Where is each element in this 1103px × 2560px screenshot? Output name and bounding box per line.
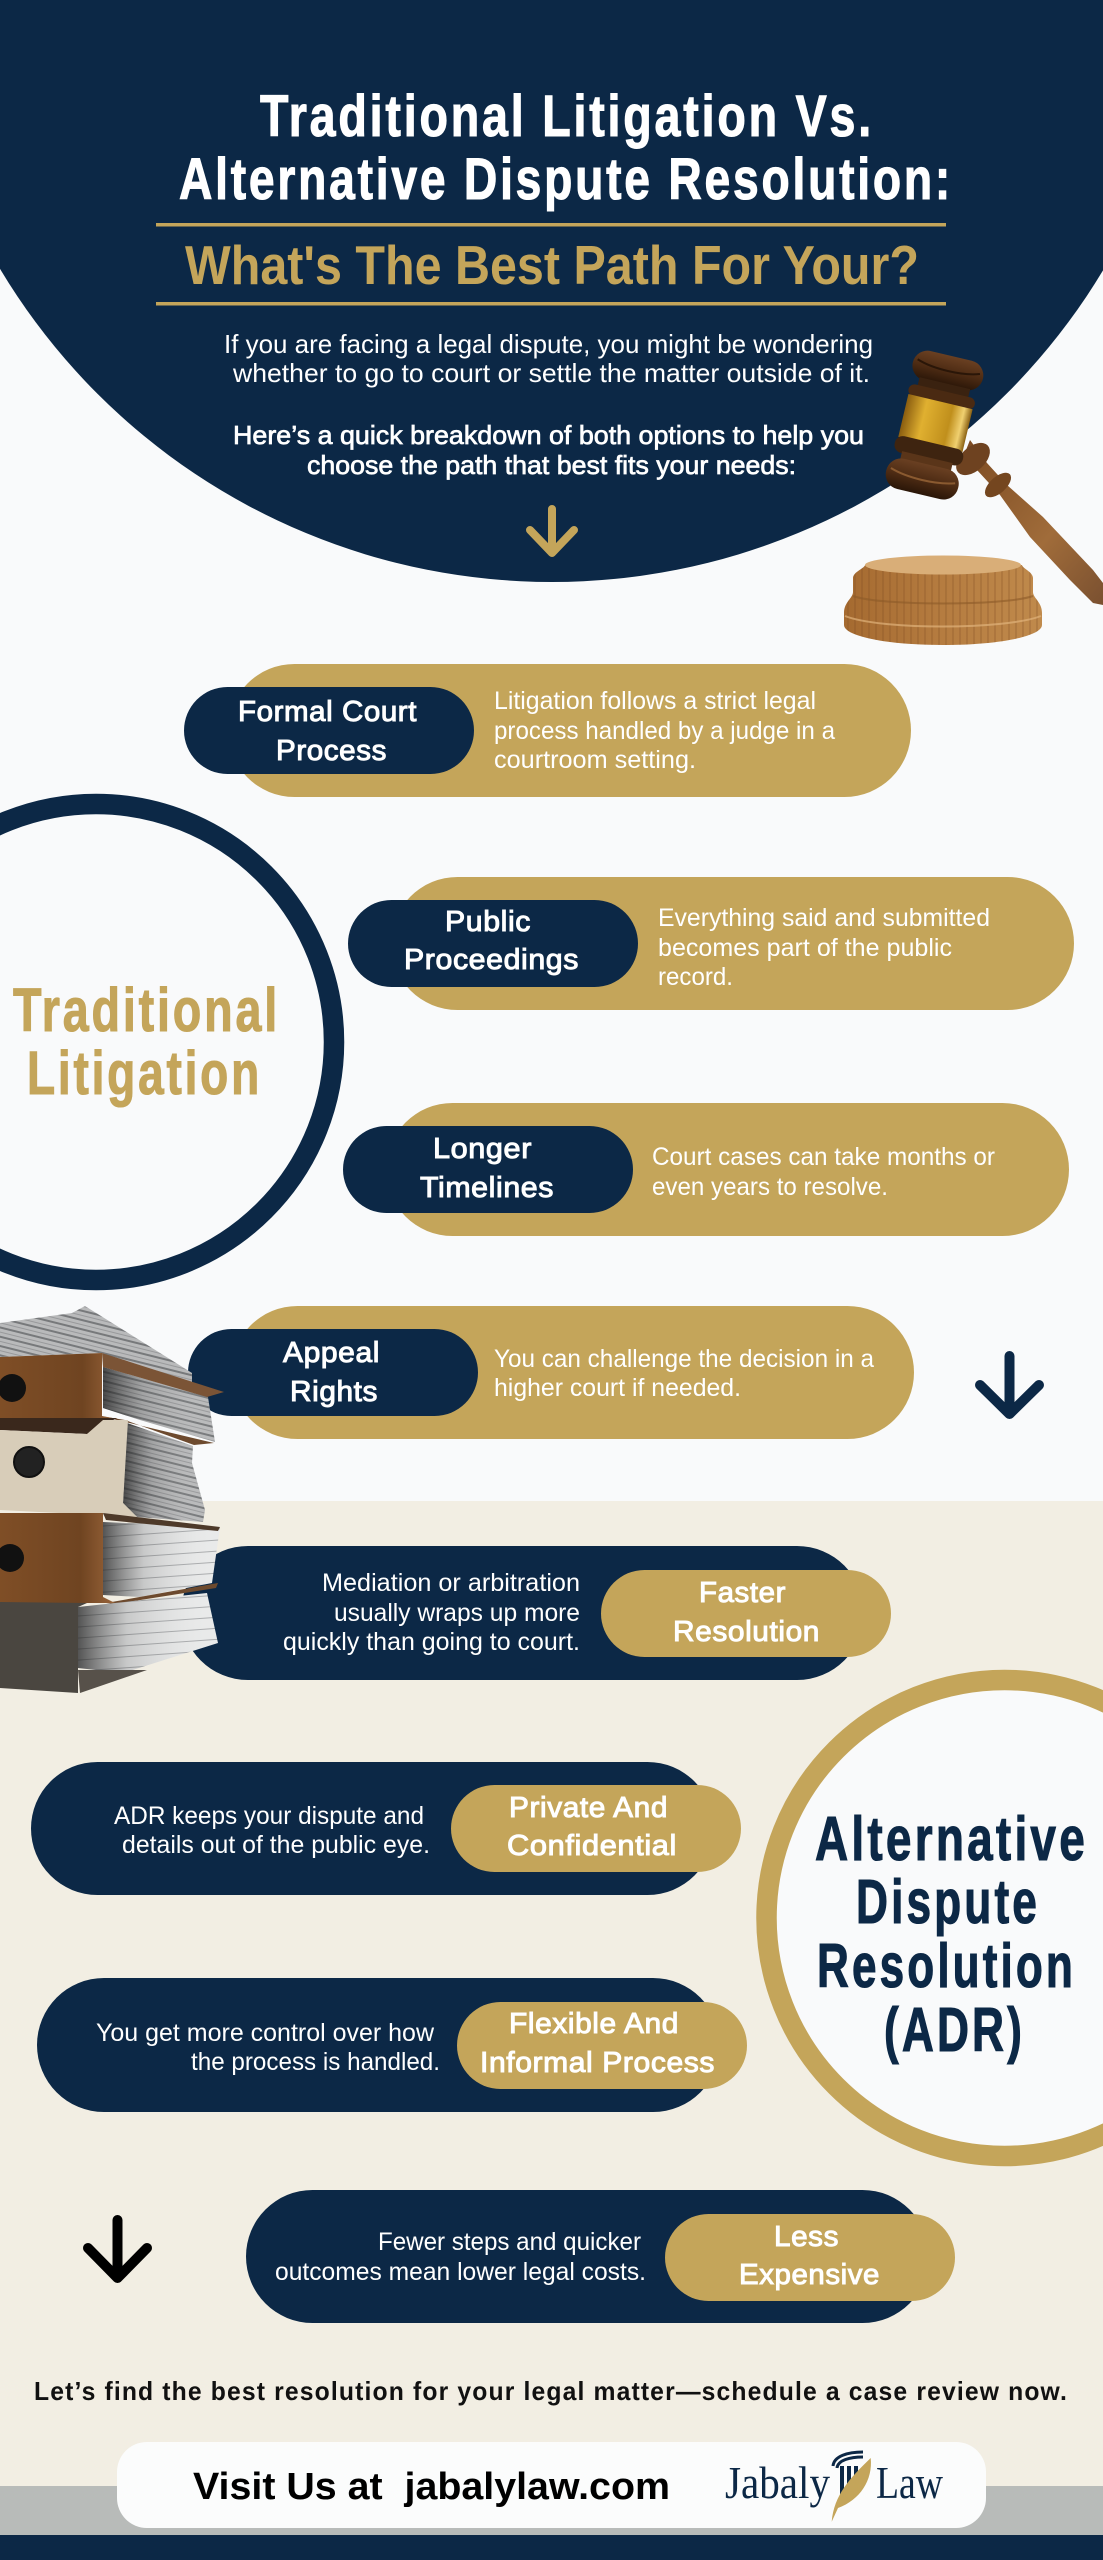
description: the process is handled. xyxy=(191,2048,440,2076)
gavel head xyxy=(883,347,987,503)
label: Appeal xyxy=(283,1337,380,1369)
label: Flexible And xyxy=(509,2008,679,2040)
intro text emphasis xyxy=(233,420,864,480)
panel: private and confidential xyxy=(31,1762,741,1895)
label: Process xyxy=(276,735,387,767)
website link text: Visit Us at jabalylaw.com xyxy=(193,2466,670,2508)
label: Expensive xyxy=(739,2259,880,2291)
description: You can challenge the decision in a xyxy=(494,1345,874,1373)
label: Longer xyxy=(433,1133,532,1165)
description: details out of the public eye. xyxy=(122,1831,430,1859)
logo: Jabaly Law xyxy=(725,2452,943,2522)
heading: Traditional Litigation: Litigation xyxy=(27,1039,262,1107)
header circle xyxy=(0,0,1103,582)
footer white card xyxy=(117,2442,986,2528)
description: even years to resolve. xyxy=(652,1173,888,1201)
logo pillar icon xyxy=(833,2452,863,2495)
description: process handled by a judge in a xyxy=(494,717,835,745)
description: Mediation or arbitration xyxy=(322,1569,580,1597)
label: Less xyxy=(774,2221,839,2253)
description: Fewer steps and quicker xyxy=(378,2228,641,2256)
label: Resolution xyxy=(673,1616,820,1648)
panel: formal court process xyxy=(184,664,911,797)
arrow: navy down xyxy=(980,1356,1039,1414)
description: becomes part of the public xyxy=(658,934,952,962)
label: Informal Process xyxy=(480,2047,715,2079)
icon: binder stack xyxy=(0,1306,224,1693)
description: Litigation follows a strict legal xyxy=(494,687,816,715)
panel: faster resolution xyxy=(181,1546,891,1680)
binder 3 xyxy=(0,1513,220,1604)
intro text: whether to go to court or settle the matter outside of it. xyxy=(232,358,870,388)
subtitle with rules: What's The Best Path For Your? xyxy=(185,234,919,296)
logo quill icon xyxy=(832,2458,871,2522)
label xyxy=(238,696,417,767)
binder 1 xyxy=(0,1353,224,1445)
description xyxy=(283,1569,580,1656)
description: higher court if needed. xyxy=(494,1374,741,1402)
label xyxy=(404,906,579,976)
heading: Traditional Litigation xyxy=(13,976,280,1107)
description xyxy=(494,687,835,774)
label: Formal Court xyxy=(238,696,417,728)
description xyxy=(658,904,990,991)
description xyxy=(652,1143,995,1201)
heading: Alternative Dispute Resolution (ADR): (ADR) xyxy=(884,1996,1025,2065)
panel: appeal rights xyxy=(188,1306,914,1439)
intro text: If you are facing a legal dispute, you might be wondering xyxy=(224,329,873,359)
logo: Jabaly Law: Jabaly xyxy=(725,2458,830,2508)
footer navy bar xyxy=(0,2535,1103,2560)
arrow: gold down xyxy=(530,509,574,553)
description xyxy=(494,1345,874,1402)
panel: ADR circle xyxy=(766,1680,1103,2156)
panel: traditional litigation circle xyxy=(0,804,334,1280)
panel: less expensive xyxy=(246,2190,955,2323)
panel: flexible and informal process xyxy=(37,1978,747,2112)
label: Private And xyxy=(509,1792,668,1824)
intro text emphasis: choose the path that best fits your needs: xyxy=(307,450,796,480)
description: usually wraps up more xyxy=(334,1599,580,1627)
description xyxy=(96,2019,440,2076)
icon: sound block xyxy=(844,556,1042,645)
intro text emphasis: Here’s a quick breakdown of both options to help you xyxy=(233,420,864,450)
binder 4 xyxy=(0,1593,218,1693)
description xyxy=(275,2228,646,2286)
title xyxy=(179,84,953,212)
top paper pile xyxy=(0,1306,192,1388)
subtitle with rules xyxy=(156,223,946,306)
description: ADR keeps your dispute and xyxy=(114,1802,424,1830)
description: quickly than going to court. xyxy=(283,1628,580,1656)
label xyxy=(283,1337,380,1408)
title: Traditional Litigation Vs. xyxy=(260,84,874,149)
call to action text: Let’s find the best resolution for your legal matter—schedule a case review now. xyxy=(34,2376,1068,2406)
panel: longer timelines xyxy=(343,1103,1069,1236)
background: beige ADR section xyxy=(0,1501,1103,2560)
panel: public proceedings xyxy=(348,877,1074,1010)
description: Court cases can take months or xyxy=(652,1143,995,1171)
label: Proceedings xyxy=(404,944,579,976)
heading: Alternative Dispute Resolution (ADR) xyxy=(815,1805,1088,2065)
label: Rights xyxy=(290,1376,378,1408)
background: page xyxy=(0,0,1103,1502)
label xyxy=(420,1133,554,1204)
description: You get more control over how xyxy=(96,2019,435,2047)
label xyxy=(739,2221,880,2291)
label: Timelines xyxy=(420,1172,554,1204)
description: Everything said and submitted xyxy=(658,904,990,932)
description: outcomes mean lower legal costs. xyxy=(275,2258,646,2286)
label xyxy=(480,2008,715,2079)
logo: Jabaly Law: Law xyxy=(876,2458,943,2508)
footer gray band xyxy=(0,2486,1103,2536)
intro text xyxy=(224,329,873,388)
label: Public xyxy=(445,906,531,938)
description: record. xyxy=(658,963,733,991)
label xyxy=(507,1792,677,1862)
gavel handle xyxy=(962,440,1103,605)
heading: Traditional Litigation: Traditional xyxy=(13,976,280,1044)
icon: gavel xyxy=(883,347,1103,605)
label: Faster xyxy=(699,1577,786,1609)
binder 2 xyxy=(0,1418,205,1522)
arrow: black down xyxy=(88,2220,147,2278)
label: Confidential xyxy=(507,1830,677,1862)
label xyxy=(673,1577,820,1648)
description: courtroom setting. xyxy=(494,746,696,774)
description xyxy=(114,1802,430,1859)
